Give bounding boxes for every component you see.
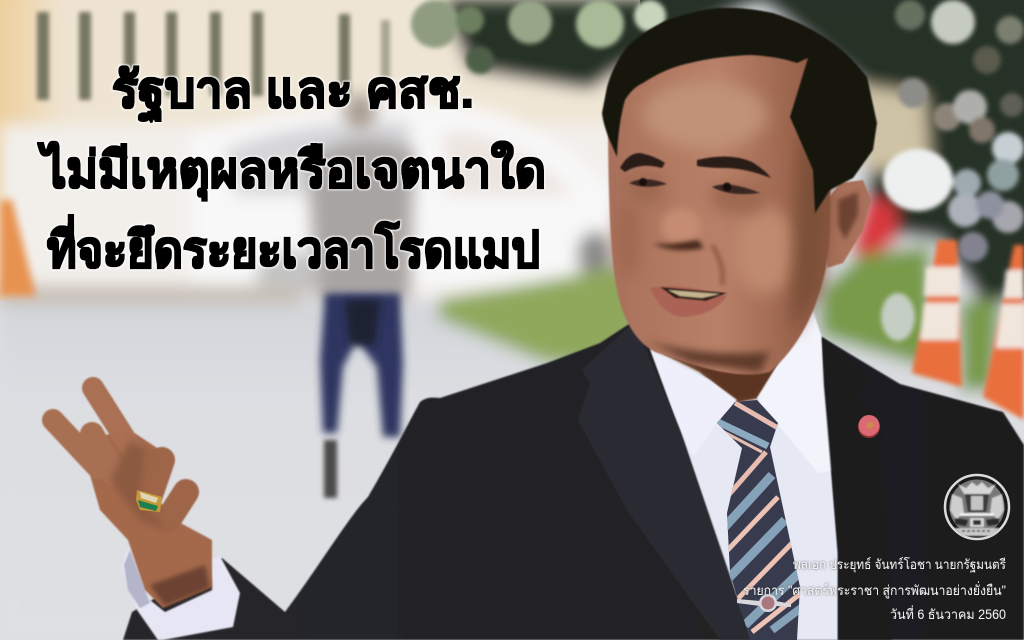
neck (640, 250, 825, 402)
source caption: วันที่ 6 ธันวาคม 2560 (890, 605, 1006, 622)
right lapel (822, 337, 892, 640)
hair (602, 8, 877, 213)
ear (827, 180, 871, 268)
left lapel (578, 322, 752, 640)
heading quote: ไม่มีเหตุผลหรือเจตนาใด (37, 141, 546, 201)
lapel pin (858, 415, 880, 438)
ring (136, 490, 162, 512)
blurred figure in background (308, 94, 414, 498)
red car (850, 195, 898, 262)
hedge (438, 262, 640, 370)
man: suit and shirt (122, 311, 1024, 640)
tie (717, 400, 805, 640)
white car (190, 102, 612, 285)
ground (0, 300, 1024, 640)
shirt (650, 308, 838, 640)
man: head (602, 8, 877, 375)
government seal (945, 475, 1009, 539)
source caption: รายการ "ศาสตร์พระราชา สู่การพัฒนาอย่างยั่งยืน" (743, 581, 1006, 599)
face shading and highlights (616, 81, 830, 372)
man: raised hand and cuff (53, 388, 240, 640)
right hedge (820, 245, 1000, 392)
mouth (650, 286, 727, 317)
building windows (37, 12, 390, 100)
heading quote (37, 62, 546, 278)
face (608, 36, 830, 375)
heading quote: รัฐบาล และ คสช. (112, 62, 474, 122)
traffic cones (912, 240, 1024, 420)
eyebrows (620, 153, 771, 178)
suit jacket (123, 322, 1024, 640)
fingers and hand (53, 388, 212, 608)
heading quote: ที่จะยึดระยะเวลาโรดแมป (47, 215, 540, 278)
bokeh lights (411, 0, 1024, 341)
eyes (629, 178, 760, 194)
tree foliage (440, 0, 1024, 300)
left traffic cone (0, 200, 36, 296)
nose (653, 240, 704, 250)
tie bar (737, 594, 791, 612)
shirt cuff (122, 548, 240, 640)
source caption (743, 556, 1006, 622)
shirt collar (650, 308, 836, 473)
